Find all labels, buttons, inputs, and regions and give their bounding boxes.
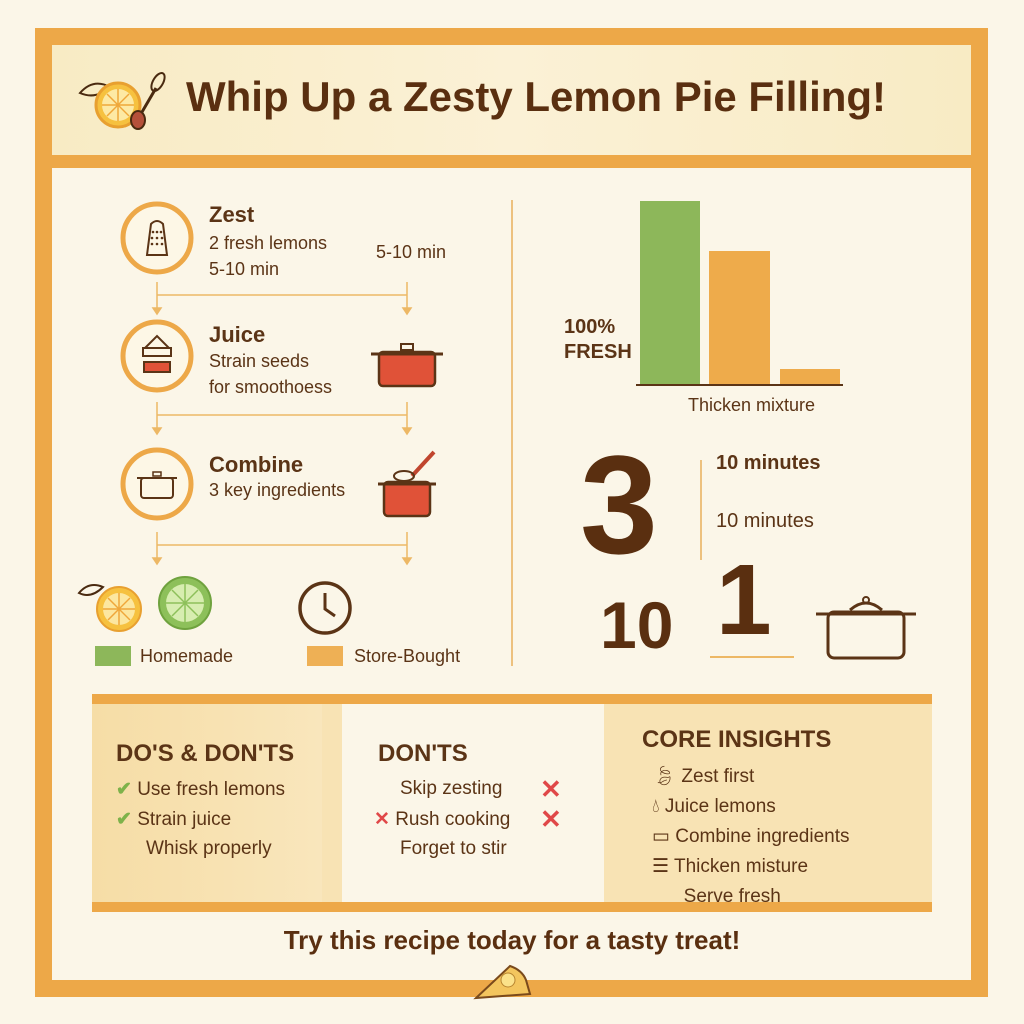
bar chart: FRESH [564,341,632,363]
legend: Store-Bought [354,646,460,666]
bar chart [564,201,843,415]
panel: do's & don'ts: ✔ Use fresh lemons [116,779,285,800]
panel: don'ts: DON'TS [378,740,468,767]
big numbers stats [580,426,916,662]
icon: clock [298,581,352,635]
process panel [78,202,460,666]
panel: do's & don'ts: DO'S & DON'TS [116,740,294,767]
step: zest: 5-10 min [209,259,279,279]
step: combine [120,448,436,520]
bar chart: 100% [564,316,615,338]
step: zest: 5-10 min [376,242,446,262]
connector arrows 1 [152,282,412,316]
panel: don'ts: Skip zesting [400,778,502,799]
big numbers stats: 3 [580,426,658,583]
tips band [92,694,932,912]
panel: don'ts: ✕ Rush cooking [374,809,510,830]
step: juice: Strain seeds [209,351,309,371]
panel: do's & don'ts: ✔ Strain juice [116,809,231,830]
legend [95,646,460,666]
header band [52,45,971,155]
header divider [52,155,971,168]
step: zest [120,202,446,279]
connector arrows 2 [152,402,412,436]
icon: lemon and whisk [78,72,166,130]
panel: do's & don'ts [92,704,322,902]
connector arrows 3 [152,532,412,566]
panel: core insights: CORE INSIGHTS [642,726,831,753]
icon: pot outline [816,596,916,660]
panel: core insights [624,704,932,902]
step: juice: Juice [209,322,265,347]
step: juice: for smoothoess [209,377,332,397]
panel: do's & don'ts: Whisk properly [146,838,272,859]
step: zest: 2 fresh lemons [209,233,327,253]
legend: Homemade [140,646,233,666]
step: combine: Combine [209,452,303,477]
bar chart: Thicken mixture [688,395,815,415]
panel: core insights: 🍃︎ Zest first [652,766,754,787]
panel: core insights: Serve fresh [684,886,781,907]
panel: don'ts [342,704,604,902]
big numbers stats: 1 [716,544,772,656]
footer call to action: Try this recipe today for a tasty treat! [284,925,740,955]
panel: core insights: ☰ Thicken misture [652,856,808,877]
step: juice [120,320,443,397]
panel: don'ts: Forget to stir [400,838,507,859]
title: Whip Up a Zesty Lemon Pie Filling! [186,73,886,120]
big numbers stats: 10 minutes [716,452,820,474]
big numbers stats: 10 [600,588,673,662]
step: zest: Zest [209,202,254,227]
vertical divider [511,200,513,666]
icon: lemons [78,576,212,632]
panel: don'ts: ✕ [540,804,562,834]
panel: don'ts: ✕ [540,774,562,804]
icon: pie slice [473,964,532,1000]
big numbers stats: 10 minutes [716,510,814,532]
step: combine: 3 key ingredients [209,480,345,500]
panel: core insights: ▭ Combine ingredients [652,826,850,847]
icon: pot with whisk [378,450,436,518]
panel: core insights: 💧︎ Juice lemons [652,796,776,817]
icon: red pot [371,343,443,388]
